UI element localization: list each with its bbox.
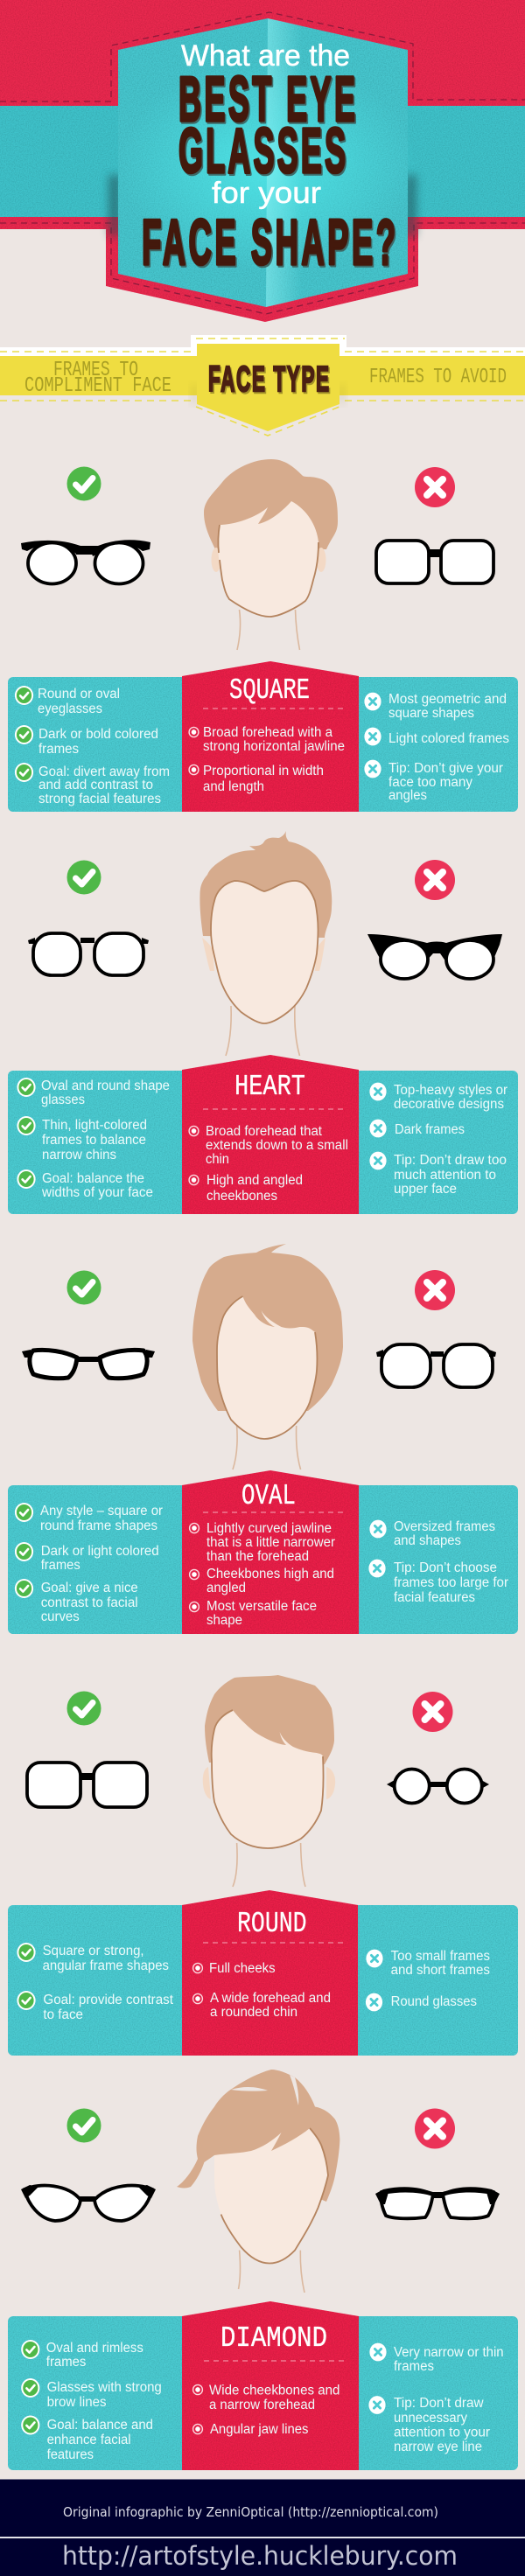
column: face traits	[190, 1480, 344, 1628]
section: heart face	[8, 831, 518, 1214]
column: face traits	[193, 1908, 344, 2020]
column: best frames: Glasses with strong	[47, 2380, 162, 2395]
column: best frames: strong facial features	[38, 792, 161, 806]
title text: BEST EYE	[178, 64, 355, 135]
column: face traits: Proportional in width	[203, 764, 324, 778]
info panel: square	[8, 661, 518, 812]
header ribbon bands	[0, 0, 525, 322]
glasses: recommended	[21, 540, 150, 584]
column: best frames: glasses	[41, 1093, 85, 1107]
column: best frames: curves	[41, 1609, 80, 1624]
column: best frames: Goal: balance the	[42, 1171, 144, 1186]
column: frames to avoid: and shapes	[394, 1533, 461, 1548]
column: best frames: frames	[46, 2355, 87, 2370]
column: best frames: Dark or bold colored	[38, 727, 158, 742]
column: frames to avoid: Tip: Don’t give your	[388, 761, 503, 776]
column: best frames	[15, 1503, 163, 1624]
column: face traits	[189, 1071, 348, 1204]
glasses: avoid	[387, 1769, 489, 1804]
glasses: recommended	[21, 2185, 156, 2221]
column: frames to avoid: angles	[388, 788, 427, 803]
column: face traits: Cheekbones high and	[206, 1567, 334, 1581]
title text: BEST EYE	[180, 66, 357, 136]
footer url: http://artofstyle.hucklebury.com	[62, 2541, 458, 2571]
info panel: heart	[8, 1055, 518, 1214]
column: frames to avoid: face too many	[388, 775, 472, 790]
title text: GLASSES	[178, 115, 346, 186]
title text	[142, 39, 397, 280]
glasses: recommended	[27, 1763, 147, 1807]
column: face traits: a narrow forehead	[209, 2398, 315, 2412]
info panel: round	[8, 1890, 518, 2056]
column: frames to avoid: Too small frames	[391, 1949, 490, 1964]
icon: recommended	[66, 861, 102, 894]
label: face type: FACE TYPE	[208, 360, 329, 400]
glasses: recommended	[28, 933, 149, 975]
column: face traits: Full cheeks	[209, 1961, 276, 1976]
label: frames to compliment face: COMPLIMENT FACE	[24, 374, 172, 398]
column: face traits: Broad forehead with a	[203, 725, 332, 740]
footer	[0, 2479, 525, 2576]
column: face traits: extends down to a small	[206, 1138, 348, 1153]
icon: avoid	[415, 1270, 455, 1310]
icon: avoid	[415, 860, 455, 900]
column: face traits	[189, 674, 345, 794]
head: oval	[192, 1244, 343, 1470]
column: frames to avoid: square shapes	[388, 706, 474, 721]
column: frames to avoid: unnecessary	[394, 2411, 467, 2426]
column: best frames: Round or oval	[38, 687, 120, 702]
column: best frames: Goal: provide contrast	[43, 1993, 174, 2007]
column: frames to avoid: Oversized frames	[394, 1519, 495, 1534]
column: frames to avoid: attention to your	[394, 2426, 490, 2440]
section: diamond face	[8, 2070, 518, 2470]
head: round	[203, 1675, 335, 1887]
column: frames to avoid: narrow eye line	[394, 2440, 482, 2454]
column: best frames: round frame shapes	[40, 1518, 158, 1533]
column: face traits: and length	[203, 779, 264, 794]
column: best frames: Square or strong,	[43, 1944, 144, 1958]
title text: What are the	[181, 39, 350, 73]
column: face traits: OVAL	[242, 1480, 296, 1512]
column: best frames: features	[47, 2447, 94, 2462]
column: face traits: that is a little narrower	[206, 1535, 335, 1550]
column: best frames: frames	[41, 1558, 80, 1573]
column: best frames: Oval and rimless	[46, 2341, 144, 2356]
head: square	[204, 459, 338, 650]
glasses: avoid	[376, 1344, 496, 1387]
column: frames to avoid: frames	[394, 2359, 434, 2374]
column: best frames: eyeglasses	[38, 702, 102, 716]
column: frames to avoid: Tip: Don’t draw too	[394, 1153, 507, 1168]
column: best frames: frames	[38, 742, 79, 757]
column: best frames: Any style – square or	[40, 1504, 163, 1518]
section: oval face	[8, 1244, 518, 1634]
column: face traits: chin	[206, 1152, 229, 1167]
column: best frames: Dark or light colored	[41, 1544, 159, 1559]
column: frames to avoid: Top-heavy styles or	[394, 1083, 508, 1098]
column: best frames: Goal: give a nice	[41, 1581, 138, 1595]
icon: recommended	[66, 1692, 102, 1725]
column: best frames: Goal: divert away from	[38, 764, 170, 779]
column: best frames: Oval and round shape	[41, 1079, 170, 1093]
column: frames to avoid: decorative designs	[394, 1097, 504, 1112]
title text: GLASSES	[180, 117, 347, 188]
head: diamond	[177, 2070, 340, 2293]
column: face traits: angled	[206, 1581, 246, 1595]
section: round face	[8, 1675, 518, 2056]
column: best frames: brow lines	[47, 2395, 107, 2410]
column header ribbon	[0, 335, 525, 436]
column: face traits: strong horizontal jawline	[203, 739, 345, 754]
column: best frames: to face	[43, 2007, 83, 2022]
column: face traits: High and angled	[206, 1173, 303, 1188]
column: face traits: DIAMOND	[220, 2322, 327, 2355]
section: square face	[8, 459, 518, 812]
column: best frames: frames to balance	[42, 1133, 146, 1148]
column: frames to avoid	[364, 692, 509, 803]
glasses: avoid	[376, 541, 494, 583]
title banner	[118, 18, 416, 307]
column: frames to avoid	[368, 1519, 508, 1605]
column: face traits: A wide forehead and	[210, 1991, 331, 2006]
glasses: avoid	[375, 2187, 500, 2218]
column: frames to avoid	[366, 1949, 490, 2011]
label: frames to compliment face	[24, 359, 172, 398]
glasses: avoid	[368, 934, 502, 979]
column: face traits: HEART	[234, 1071, 305, 1103]
icon: avoid	[413, 1692, 453, 1732]
column: frames to avoid: Light colored frames	[388, 731, 509, 746]
column: face traits: a rounded chin	[210, 2005, 298, 2020]
column: best frames	[17, 1078, 170, 1200]
icon: recommended	[66, 1270, 102, 1305]
column: best frames: Thin, light-colored	[42, 1118, 147, 1133]
column: best frames: enhance facial	[47, 2433, 131, 2447]
column: frames to avoid: much attention to	[394, 1168, 496, 1183]
column: face traits: Angular jaw lines	[210, 2422, 309, 2437]
column: frames to avoid: Round glasses	[391, 1994, 477, 2009]
column: frames to avoid	[369, 1083, 508, 1197]
column: face traits	[193, 2322, 345, 2437]
column: frames to avoid: upper face	[394, 1182, 457, 1197]
column: best frames	[15, 686, 170, 806]
column: face traits: ROUND	[237, 1908, 307, 1940]
head: heart	[200, 831, 332, 1056]
icon: avoid	[415, 467, 455, 507]
column: face traits: cheekbones	[206, 1189, 277, 1204]
icon: recommended	[66, 467, 102, 500]
column: best frames: contrast to facial	[41, 1595, 138, 1610]
column: frames to avoid: facial features	[394, 1590, 475, 1605]
column: face traits: Lightly curved jawline	[206, 1521, 332, 1536]
column: best frames: Goal: balance and	[47, 2418, 153, 2433]
column: frames to avoid: Tip: Don’t choose	[394, 1560, 497, 1575]
column: face traits: shape	[206, 1613, 242, 1628]
column: best frames: and add contrast to	[38, 778, 153, 792]
column: face traits: Broad forehead that	[206, 1124, 323, 1139]
title text: FACE SHAPE?	[144, 209, 397, 280]
column: frames to avoid	[368, 2343, 504, 2454]
label: frames to compliment face: FRAMES TO	[53, 359, 138, 382]
column: face traits: than the forehead	[206, 1549, 309, 1564]
column: face traits: Most versatile face	[206, 1599, 317, 1614]
column: best frames: angular frame shapes	[43, 1958, 169, 1973]
column: frames to avoid: Most geometric and	[388, 692, 507, 707]
column: face traits: Wide cheekbones and	[209, 2383, 340, 2398]
info panel: diamond	[8, 2301, 518, 2470]
column: face traits: SQUARE	[229, 674, 310, 707]
column: best frames	[17, 1943, 174, 2022]
column: best frames	[21, 2340, 162, 2462]
column: best frames: widths of your face	[41, 1185, 153, 1200]
column: frames to avoid: and short frames	[391, 1963, 490, 1978]
column: frames to avoid: Very narrow or thin	[394, 2345, 504, 2360]
footer credit: Original infographic by ZenniOptical (http://zennioptical.com)	[63, 2504, 438, 2520]
column: frames to avoid: frames too large for	[394, 1575, 508, 1590]
icon: recommended	[66, 2108, 102, 2143]
icon: avoid	[415, 2108, 455, 2148]
column: frames to avoid: Tip: Don’t draw	[394, 2396, 484, 2411]
info panel: oval	[8, 1470, 518, 1634]
column: best frames: narrow chins	[42, 1148, 116, 1162]
title text: for your	[212, 177, 321, 210]
glasses: recommended	[22, 1350, 155, 1379]
label: face type: FACE TYPE	[210, 361, 331, 401]
column: frames to avoid: Dark frames	[395, 1122, 465, 1137]
title text: FACE SHAPE?	[142, 207, 396, 278]
